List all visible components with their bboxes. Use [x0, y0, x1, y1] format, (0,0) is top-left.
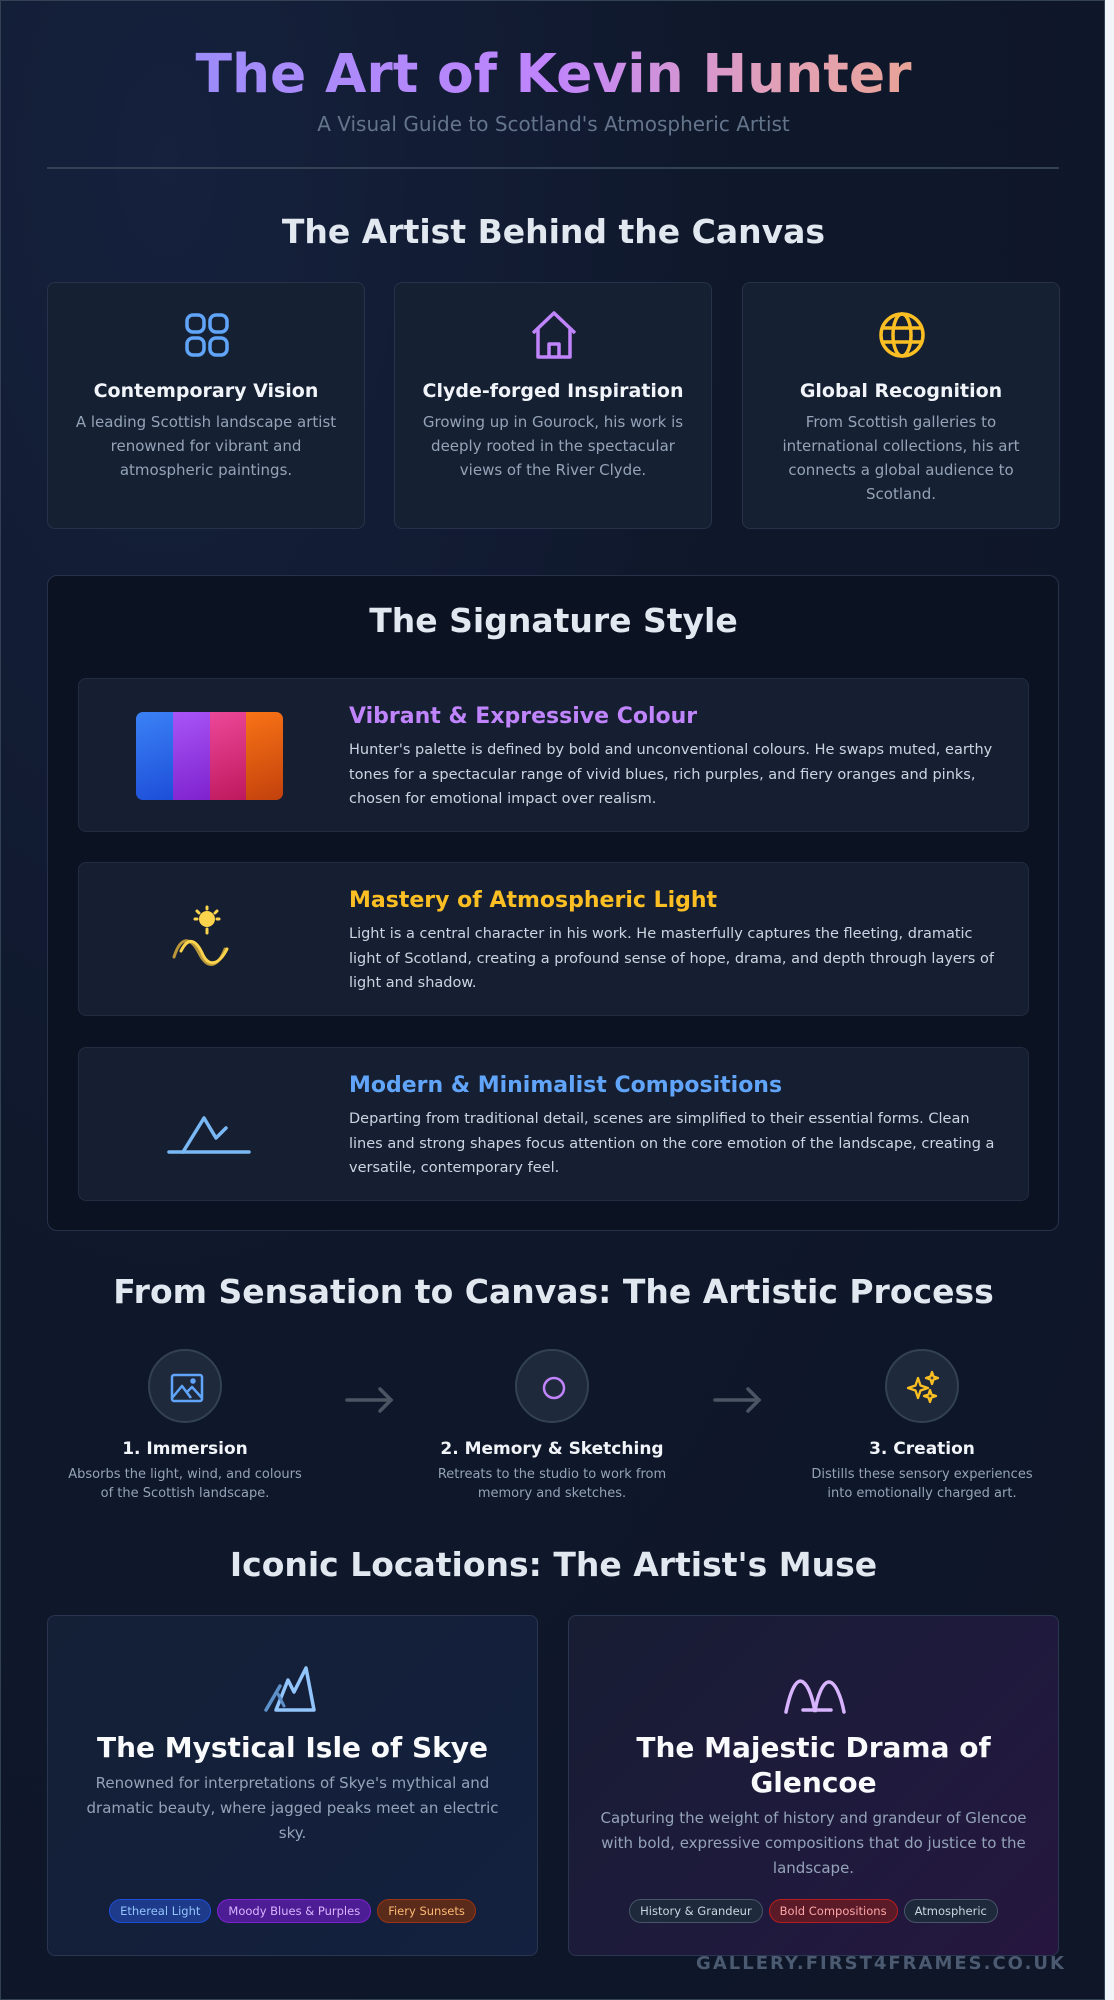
arrow [713, 1387, 762, 1413]
step: immersion: of the Scottish landscape. [101, 1486, 269, 1501]
step: creation [811, 1349, 1033, 1501]
icon: sparkles [885, 1349, 959, 1423]
item: vibrant colour: Hunter's palette is defined by bold and unconventional colours. He swaps muted, earthy tones for a spectacular range of vivid blues, rich purples, and fiery oranges and pinks, chosen for emotional impact over realism. [349, 742, 992, 807]
tags: skye: Moody Blues & Purples [228, 1904, 360, 1918]
item: vibrant colour [78, 678, 1029, 832]
step: immersion [68, 1349, 302, 1501]
card: glencoe: The Majestic Drama of Glencoe [636, 1731, 991, 1799]
step: creation: 3. Creation [869, 1439, 975, 1459]
card: global recognition [742, 282, 1060, 529]
title: The Art of Kevin Hunter [195, 42, 912, 105]
card: clyde-forged inspiration: Clyde-forged Inspiration [422, 380, 684, 402]
icon: house [532, 311, 576, 359]
card: clyde-forged inspiration: Growing up in Gourock, his work is deeply rooted in the spectacular views of the River Clyde. [423, 413, 683, 479]
step: memory & sketching: Retreats to the studio to work from [438, 1467, 666, 1482]
card: clyde-forged inspiration [394, 282, 712, 529]
card: global recognition: Global Recognition [800, 380, 1002, 402]
card: isle of skye: The Mystical Isle of Skye [97, 1731, 488, 1764]
heading: iconic locations: Iconic Locations: The Artist's Muse [230, 1545, 877, 1584]
tags: glencoe: History & Grandeur [640, 1904, 752, 1918]
step: creation: into emotionally charged art. [827, 1486, 1017, 1501]
step: memory & sketching: memory and sketches. [478, 1486, 626, 1501]
tags: glencoe: Bold Compositions [780, 1904, 887, 1918]
icon: palette swatch [136, 712, 283, 800]
icon: jagged peaks [264, 1666, 316, 1712]
subtitle: A Visual Guide to Scotland's Atmospheric Artist [317, 112, 790, 136]
tags: skye [109, 1899, 476, 1923]
icon: minimalist peak [167, 1116, 251, 1154]
arrow [345, 1387, 394, 1413]
icon: rolling hills [784, 1679, 846, 1714]
step: memory & sketching: 2. Memory & Sketching [440, 1439, 664, 1459]
panel: signature style [47, 575, 1059, 1231]
tags: skye: Fiery Sunsets [388, 1904, 465, 1918]
heading: artist behind the canvas: The Artist Behind the Canvas [282, 212, 825, 251]
icon: image [148, 1349, 222, 1423]
icon: globe [879, 312, 925, 358]
card: isle of skye: Renowned for interpretations of Skye's mythical and dramatic beauty, where jagged peaks meet an electric sky. [86, 1774, 498, 1842]
tags: skye: Ethereal Light [120, 1904, 200, 1918]
step: memory & sketching [438, 1349, 666, 1501]
title [1, 41, 1106, 107]
card: glencoe: Capturing the weight of history and grandeur of Glencoe with bold, expressive compositions that do justice to the landscape. [600, 1809, 1026, 1877]
card: contemporary vision [47, 282, 365, 529]
icon: grid [185, 313, 229, 357]
step: immersion: 1. Immersion [122, 1439, 248, 1459]
card: glencoe [568, 1615, 1059, 1956]
card: contemporary vision: A leading Scottish landscape artist renowned for vibrant and atmospheric paintings. [76, 413, 336, 479]
step: creation: Distills these sensory experiences [811, 1467, 1033, 1482]
icon: circle [515, 1349, 589, 1423]
item: minimalist compositions [78, 1047, 1029, 1201]
item: atmospheric light: Light is a central character in his work. He masterfully captures the fleeting, dramatic light of Scotland, creating a profound sense of hope, drama, and depth through layers of light and shadow. [349, 926, 994, 991]
item: atmospheric light: Mastery of Atmospheric Light [349, 888, 717, 913]
heading: signature style: The Signature Style [369, 601, 738, 640]
card: contemporary vision: Contemporary Vision [94, 380, 318, 402]
footer: GALLERY.FIRST4FRAMES.CO.UK [696, 1953, 1066, 1974]
item: minimalist compositions: Departing from traditional detail, scenes are simplified to their essential forms. Clean lines and strong shapes focus attention on the core emotion of the landscape, creating a versatile, contemporary feel. [349, 1111, 994, 1176]
heading: artistic process: From Sensation to Canvas: The Artistic Process [113, 1272, 994, 1311]
tags: glencoe: Atmospheric [915, 1904, 987, 1918]
icon: sun and wave [172, 906, 229, 966]
item: atmospheric light [78, 862, 1029, 1016]
card: isle of skye [47, 1615, 538, 1956]
tags: glencoe [629, 1899, 998, 1923]
item: minimalist compositions: Modern & Minimalist Compositions [349, 1073, 782, 1098]
card: global recognition: From Scottish galleries to international collections, his art connects a global audience to Scotland. [782, 413, 1020, 503]
step: immersion: Absorbs the light, wind, and colours [68, 1467, 302, 1482]
item: vibrant colour: Vibrant & Expressive Colour [349, 704, 697, 729]
